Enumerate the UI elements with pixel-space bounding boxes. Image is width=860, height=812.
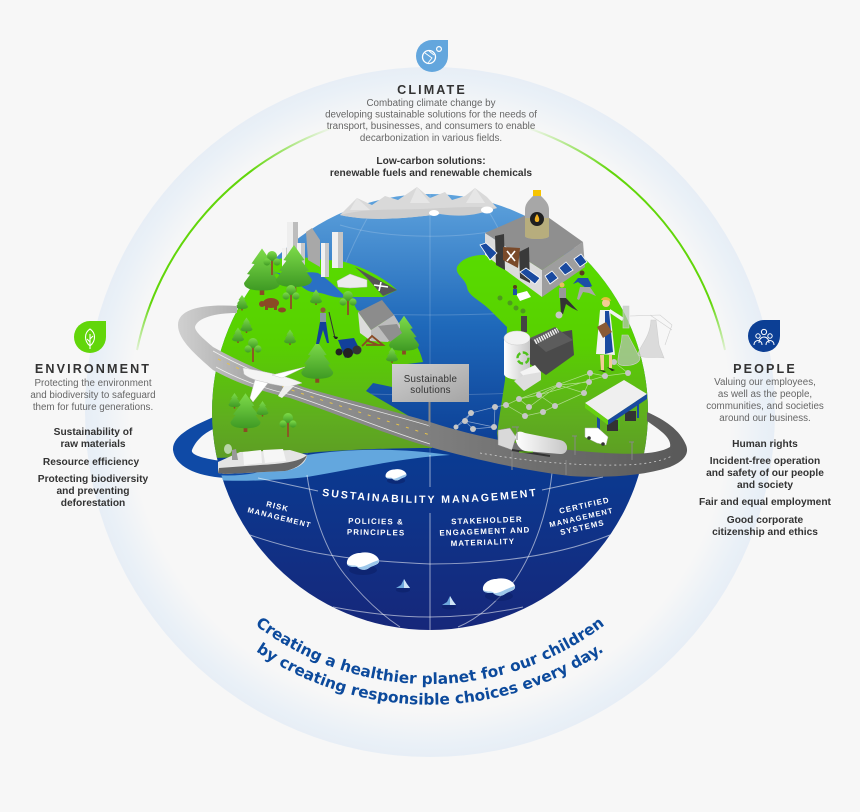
environment focus areas: deforestation (61, 498, 125, 509)
fuel bottle (525, 190, 549, 239)
climate focus areas: Low-carbon solutions: (376, 156, 486, 167)
environment description: Protecting the environment (34, 378, 152, 389)
people focus areas: Incident-free operation (710, 456, 820, 467)
environment focus areas: Resource efficiency (43, 457, 139, 468)
environment description: them for future generations. (33, 402, 153, 413)
icebergs (347, 469, 515, 610)
left continent (205, 257, 432, 470)
network of dots (454, 312, 631, 432)
cafe table (498, 285, 531, 314)
city skyscrapers (282, 222, 343, 277)
people description: Valuing our employees, (714, 377, 816, 388)
road centre dashes (218, 359, 430, 435)
farmer (316, 307, 338, 344)
road ring (178, 306, 687, 477)
street lamps (512, 427, 634, 475)
climate heading: CLIMATE (397, 83, 467, 97)
factory entrance (495, 234, 530, 283)
lower grid lines (250, 455, 610, 630)
sustainable solutions sign (392, 364, 469, 426)
people description: as well as the people, (718, 389, 812, 400)
airport (337, 267, 397, 296)
recycling tank and fish factory (504, 316, 574, 391)
climate focus areas (330, 156, 532, 179)
icon: environment (74, 321, 106, 353)
climate focus areas: renewable fuels and renewable chemicals (330, 168, 532, 179)
gas station (585, 380, 647, 446)
green arc right (525, 127, 725, 350)
people focus areas: and society (737, 480, 793, 491)
people focus areas: and safety of our people (706, 468, 824, 479)
people focus areas: Good corporate (727, 515, 804, 526)
airplane (243, 367, 305, 402)
icon: climate (416, 40, 448, 72)
sustainable solutions sign: Sustainable (404, 374, 458, 385)
environment description (30, 378, 156, 413)
stakeholder engagement and materiality: MATERIALITY (450, 537, 515, 548)
lake on left continent (275, 272, 346, 298)
factory with awnings (480, 210, 587, 297)
policies and principles: POLICIES & (348, 517, 404, 526)
house (358, 300, 402, 342)
polar mountains (340, 187, 497, 219)
environment focus areas: Sustainability of (54, 427, 133, 438)
bears (259, 298, 286, 312)
right continent (456, 255, 648, 454)
people description: around our business. (719, 413, 811, 424)
stakeholder engagement and materiality (439, 515, 531, 548)
icon: people (748, 320, 780, 352)
people focus areas: citizenship and ethics (712, 527, 818, 538)
stakeholder engagement and materiality: ENGAGEMENT AND (439, 525, 531, 538)
people focus areas: Fair and equal employment (699, 497, 832, 508)
tractor (336, 336, 383, 358)
trees (228, 245, 419, 437)
ship (218, 444, 307, 474)
environment focus areas (38, 427, 149, 509)
road edge line (213, 351, 430, 426)
certified management systems (548, 495, 614, 537)
people description (706, 377, 824, 424)
blue awnings (480, 243, 587, 284)
outer pale ring (85, 67, 775, 757)
people focus areas (699, 439, 832, 538)
car (585, 428, 608, 445)
climate description: developing sustainable solutions for the needs of (325, 110, 537, 120)
scientist (596, 297, 624, 372)
climate description: decarbonization in various fields. (360, 133, 502, 144)
green arc left (137, 127, 335, 350)
risk management: RISK (265, 499, 290, 514)
policies and principles (347, 517, 405, 538)
bottom slogan: Creating a healthier planet for our children (258, 618, 604, 688)
upper grid lines (306, 194, 503, 455)
policies and principles: PRINCIPLES (347, 527, 405, 538)
people focus areas: Human rights (732, 439, 798, 450)
globe (173, 194, 660, 630)
certified management systems: CERTIFIED (558, 495, 611, 516)
people running (559, 270, 596, 314)
sustainable solutions sign: solutions (410, 385, 451, 396)
environment heading: ENVIRONMENT (35, 362, 151, 376)
people description: communities, and societies (706, 401, 824, 412)
climate description (325, 98, 537, 144)
environment focus areas: Protecting biodiversity (38, 474, 149, 485)
climate description: transport, businesses, and consumers to enable (327, 121, 536, 132)
blue ribbon river, left (173, 416, 300, 478)
environment focus areas: and preventing (56, 486, 130, 497)
certified management systems: MANAGEMENT (548, 506, 614, 529)
stakeholder engagement and materiality: STAKEHOLDER (451, 515, 523, 526)
lab flasks (618, 306, 672, 366)
risk management: MANAGEMENT (247, 505, 313, 530)
ocean (212, 194, 648, 630)
tanker truck (498, 428, 567, 456)
environment focus areas: raw materials (60, 439, 126, 450)
people heading: PEOPLE (733, 362, 797, 376)
sustainability management heading: SUSTAINABILITY MANAGEMENT (322, 488, 536, 503)
environment description: and biodiversity to safeguard (30, 390, 156, 401)
light blue water band (215, 450, 450, 481)
certified management systems: SYSTEMS (559, 518, 606, 537)
climate description: Combating climate change by (366, 98, 496, 109)
bottom slogan: by creating responsible choices every day. (256, 642, 603, 705)
